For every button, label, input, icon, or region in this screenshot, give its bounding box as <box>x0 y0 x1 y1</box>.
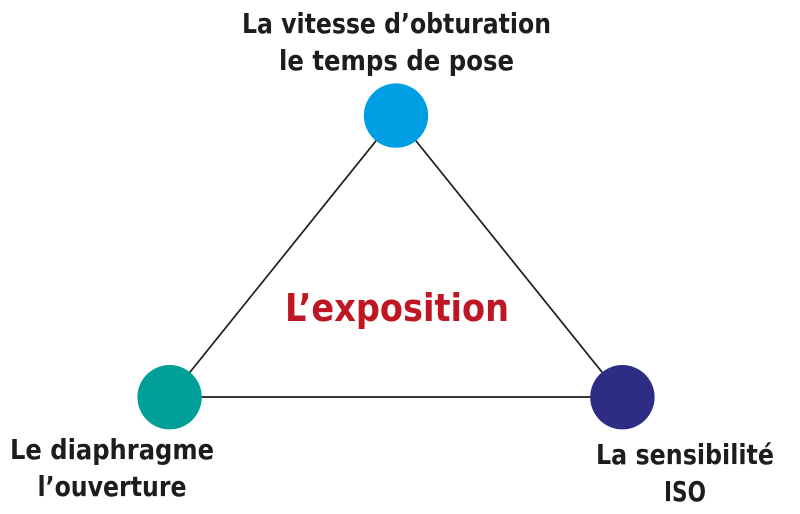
triangle lines <box>170 116 622 397</box>
heading: aperture label: Le diaphragme <box>10 434 214 466</box>
heading: aperture label <box>10 434 214 503</box>
center title: L’exposition <box>285 286 509 331</box>
heading: ISO label: ISO <box>664 476 706 508</box>
heading: ISO label <box>596 439 774 508</box>
heading: shutter speed label: La vitesse d’obturation <box>242 8 551 40</box>
node: ISO circle <box>590 365 655 429</box>
heading: ISO label: La sensibilité <box>596 439 774 471</box>
node: aperture circle <box>137 365 202 429</box>
heading: aperture label: l’ouverture <box>38 471 186 503</box>
heading: shutter speed label: le temps de pose <box>279 45 514 77</box>
heading: shutter speed label <box>242 8 551 77</box>
node: shutter speed circle <box>364 83 428 148</box>
